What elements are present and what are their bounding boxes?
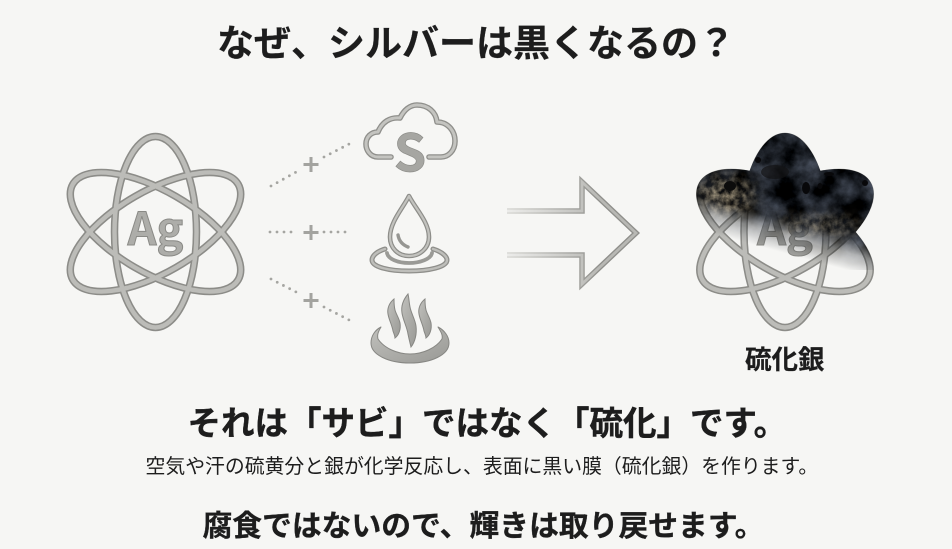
arrow: [507, 182, 636, 284]
connector: sulfur dotted line with plus: [271, 143, 351, 186]
icon: tarnished silver atom: [696, 132, 874, 332]
icon: hot spring heat: [371, 294, 449, 363]
title: なぜ、シルバーは黒くなるの？: [217, 23, 735, 64]
text block: explanation: 空気や汗の硫黄分と銀が化学反応し、表面に黒い膜（硫化銀）を作ります。: [146, 456, 818, 478]
letter S: S: [394, 112, 426, 186]
text block: conclusion: 腐食ではないので、輝きは取り戻せます。: [202, 510, 764, 542]
connector: water dotted line with plus: [270, 225, 351, 240]
heading: not rust but sulfurization: それは「サビ」ではなく「硫化」です。: [188, 406, 787, 443]
label: silver sulfide: 硫化銀: [745, 345, 824, 375]
icon: silver atom: [52, 136, 259, 328]
black sulfide tarnish layer: [696, 133, 874, 270]
atom symbol Ag: Ag: [127, 193, 183, 258]
connector: heat dotted line with plus: [271, 279, 351, 321]
icon: sulfur cloud: [366, 105, 455, 186]
icon: water drop with ripples: [372, 196, 447, 271]
atom symbol Ag under tarnish: Ag: [756, 193, 813, 258]
